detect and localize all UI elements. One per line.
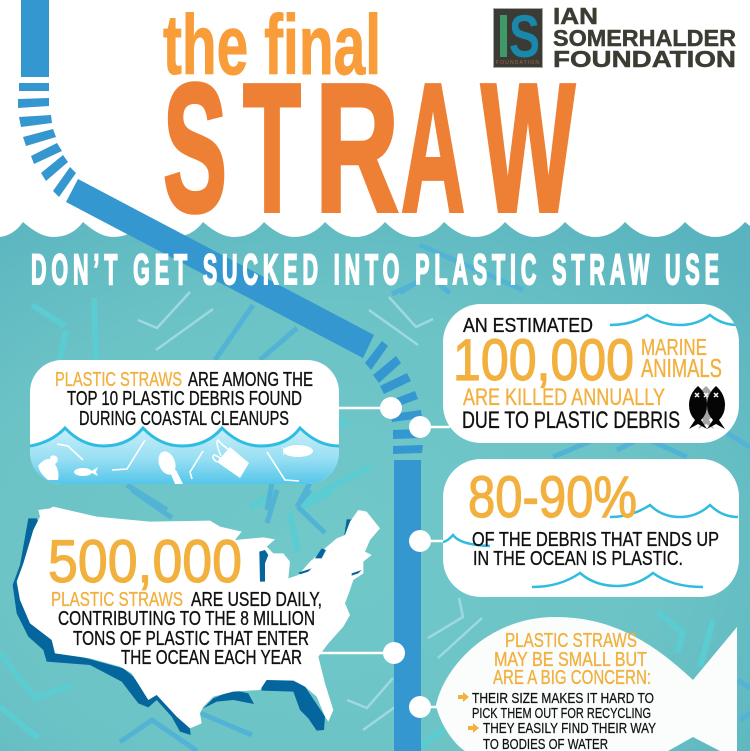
panel: 100,000 marine animals [443, 304, 739, 443]
bullet one [458, 690, 654, 722]
title: STRAW: T [243, 45, 301, 250]
text: due to plastic debris: DUE TO PLASTIC DEBRIS [462, 407, 680, 434]
bullet one: THEIR SIZE MAKES IT HARD TO [472, 690, 654, 707]
panel: fish with big concern [436, 617, 737, 751]
title: the final: the final [163, 0, 381, 92]
card text: PLASTIC STRAWS [55, 368, 182, 391]
fish heading: MAY BE SMALL BUT [494, 648, 647, 671]
title: STRAW: A [401, 45, 465, 250]
text: killed annually: ARE KILLED ANNUALLY [463, 384, 665, 411]
waves [443, 505, 738, 587]
bullet two: THEY EASILY FIND THEIR WAY [483, 720, 656, 737]
heading: subtitle: DON’T GET SUCKED INTO PLASTIC STRAW USE [31, 246, 719, 294]
title: STRAW: S [163, 45, 227, 250]
title: STRAW: W [481, 45, 575, 250]
fish heading: ARE A BIG CONCERN: [493, 666, 651, 689]
logo mark [494, 3, 542, 70]
card text: ARE AMONG THE [188, 368, 313, 391]
icon: dead fish [689, 386, 725, 429]
logo mark: S [509, 3, 540, 70]
fish heading: PLASTIC STRAWS [505, 629, 637, 652]
logo wordmark: IAN [553, 3, 598, 29]
panel: coastal cleanups [30, 360, 339, 484]
logo wordmark [553, 3, 736, 72]
map [13, 507, 380, 735]
map text: PLASTIC STRAWS [51, 588, 183, 611]
card text: IN THE OCEAN IS PLASTIC. [473, 547, 683, 570]
map text [51, 588, 322, 669]
map text: THE OCEAN EACH YEAR [121, 646, 302, 669]
bendy straw [18, 0, 423, 751]
fish heading [493, 629, 651, 689]
wave [610, 315, 738, 325]
connector lines [320, 408, 450, 707]
map text: ARE USED DAILY, [191, 588, 322, 611]
card text: DURING COASTAL CLEANUPS [79, 407, 289, 430]
text: an estimated: AN ESTIMATED [463, 314, 593, 337]
card text [472, 528, 719, 570]
panel: 80-90% [443, 459, 739, 597]
water with debris illustration [30, 428, 339, 484]
connector dots [380, 397, 431, 718]
logo: Ian Somerhalder Foundation [494, 3, 736, 72]
map text: CONTRIBUTING TO THE 8 MILLION [58, 607, 315, 630]
card text: TOP 10 PLASTIC DEBRIS FOUND [67, 387, 302, 410]
panel: USA map with 500,000 [13, 507, 380, 735]
logo wordmark: FOUNDATION [553, 46, 736, 72]
text: marine animals: MARINE [641, 334, 707, 360]
stat: 500,000: 500,000 [48, 528, 242, 595]
map text: TONS OF PLASTIC THAT ENTER [73, 627, 309, 650]
ocean background [0, 222, 750, 751]
logo wordmark: SOMERHALDER [553, 25, 736, 51]
card text [55, 368, 313, 430]
title: STRAW [163, 45, 575, 250]
text: marine animals [641, 334, 722, 383]
logo mark: FOUNDATION [496, 60, 539, 66]
stat: 100,000: 100,000 [453, 328, 634, 393]
bullet one: PICK THEM OUT FOR RECYCLING [472, 705, 651, 722]
stat: 80-90%: 80-90% [468, 465, 637, 530]
bullet two [468, 720, 656, 751]
title: STRAW: R [315, 45, 399, 250]
